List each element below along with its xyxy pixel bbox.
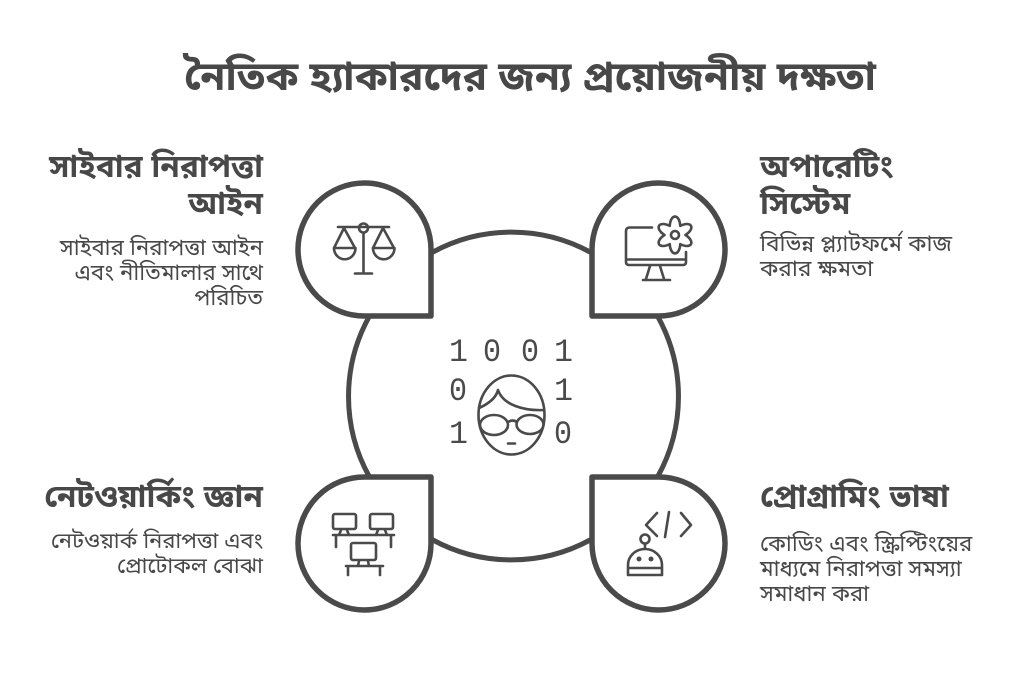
text: operating system: [760, 230, 952, 281]
heading: programming: প্রোগ্রামিং ভাষা: [760, 478, 949, 514]
text: cyber law: এবং নীতিমালার সাথে: [75, 260, 263, 285]
heading: cyber law: সাইবার নিরাপত্তা: [49, 148, 263, 184]
text: cyber law: পরিচিত: [194, 285, 263, 310]
text: cyber law: [60, 234, 264, 310]
petal: top right: [592, 183, 725, 316]
text: programming: [760, 530, 972, 606]
title: নৈতিক হ্যাকারদের জন্য প্রয়োজনীয় দক্ষতা: [184, 53, 876, 99]
binary digits: 1: [554, 334, 573, 371]
heading: operating system: [760, 148, 893, 221]
icon: networked computers: [333, 514, 394, 575]
heading: operating system: সিস্টেম: [760, 185, 850, 221]
binary digits: 0: [483, 334, 501, 371]
heading: cyber law: আইন: [188, 185, 263, 221]
text: programming: সমাধান করা: [760, 581, 869, 606]
binary digits: 1: [449, 334, 468, 371]
petal: top left: [298, 183, 431, 316]
petal: bottom left: [298, 477, 431, 610]
text: cyber law: সাইবার নিরাপত্তা আইন: [60, 235, 263, 260]
text: networking: [51, 528, 264, 578]
text: networking: প্রোটোকল বোঝা: [117, 553, 263, 578]
text: programming: কোডিং এবং স্ক্রিপ্টিংয়ের: [760, 531, 972, 556]
central circle arcs: [349, 232, 678, 560]
text: operating system: বিভিন্ন প্ল্যাটফর্মে কাজ: [760, 230, 952, 256]
petal: bottom right: [592, 477, 725, 610]
heading: cyber law: [48, 148, 264, 221]
heading: networking: নেটওয়ার্কিং জ্ঞান: [44, 478, 263, 514]
text: networking: নেটওয়ার্ক নিরাপত্তা এবং: [51, 528, 263, 553]
text: programming: মাধ্যমে নিরাপত্তা সমস্যা: [760, 556, 962, 581]
icon: robot with code: [628, 512, 691, 575]
binary digits: 0: [449, 373, 467, 410]
heading: operating system: অপারেটিং: [760, 148, 893, 184]
text: operating system: করার ক্ষমতা: [760, 255, 873, 281]
icon: hacker face: [478, 376, 544, 454]
icon: monitor with gear: [626, 217, 691, 280]
binary digits: 0: [554, 416, 572, 453]
binary digits: 1: [554, 373, 573, 410]
binary digits: [449, 334, 573, 453]
icon: scales: [334, 224, 394, 274]
binary digits: 1: [449, 416, 468, 453]
binary digits: 0: [521, 334, 539, 371]
